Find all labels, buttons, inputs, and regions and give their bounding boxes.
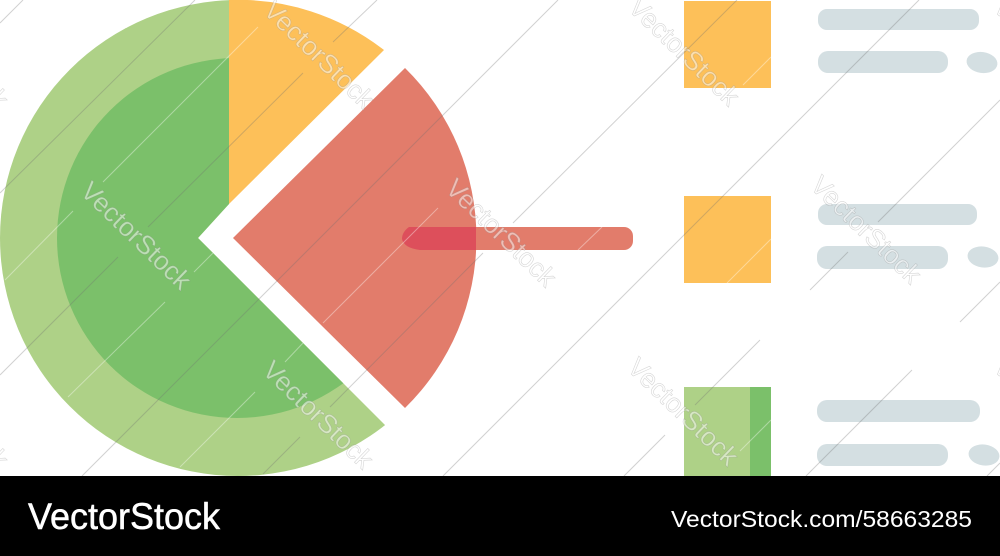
swatch: green xyxy=(684,387,771,476)
pie slice: orange xyxy=(229,0,384,204)
watermarks: VectorStock xyxy=(257,355,380,475)
text placeholder lines xyxy=(818,9,999,75)
pie slice: red xyxy=(233,68,476,408)
text placeholder lines xyxy=(817,400,1000,468)
footer logo text: VectorStock xyxy=(28,496,220,537)
footer bar xyxy=(0,476,1000,556)
footer image id: VectorStock.com/58663285 xyxy=(671,506,972,532)
text placeholder lines xyxy=(817,204,1000,270)
watermarks: VectorStock xyxy=(75,176,198,296)
watermarks: VectorStock xyxy=(440,173,563,293)
legend item 3 xyxy=(684,387,1000,476)
swatch: orange xyxy=(684,1,771,88)
pie slice: green outer ring xyxy=(0,0,385,476)
legend item 1 xyxy=(684,1,999,88)
connector bar from red slice xyxy=(402,227,633,250)
legend item 2 xyxy=(684,196,1000,283)
swatch: orange xyxy=(684,196,771,283)
pie slice: green inner circle xyxy=(57,58,344,418)
watermarks: VectorStock xyxy=(805,170,928,290)
pie chart xyxy=(0,0,476,476)
watermarks: VectorStock xyxy=(622,352,745,472)
